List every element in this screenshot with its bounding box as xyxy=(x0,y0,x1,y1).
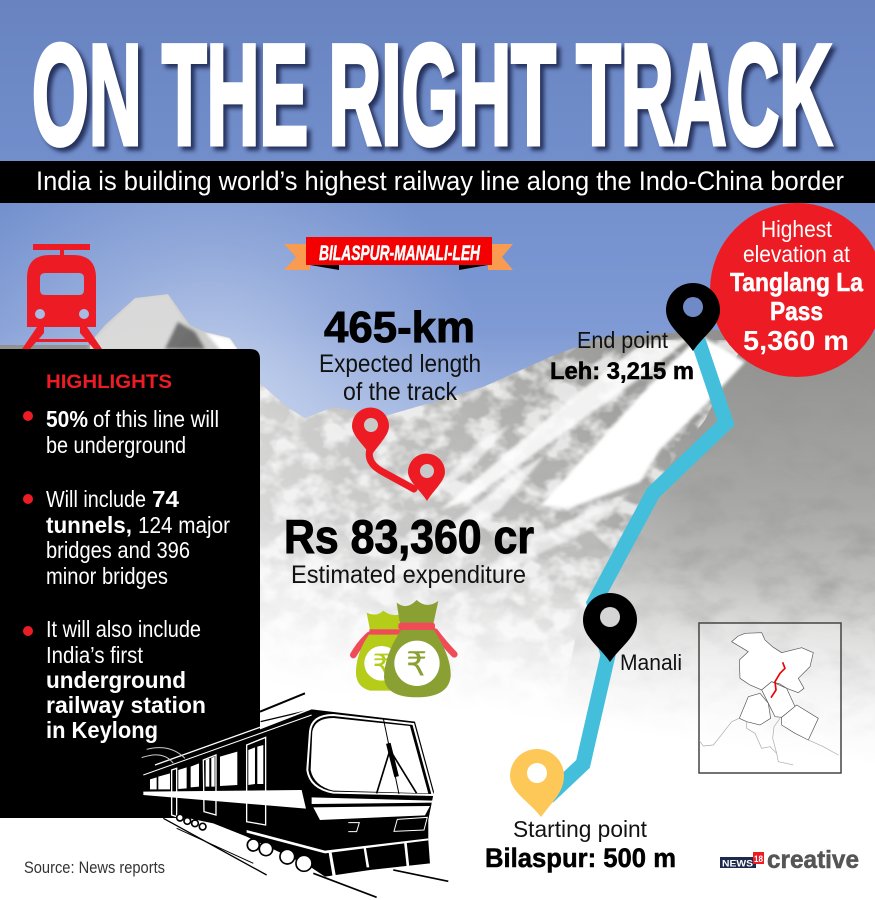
panel: highlights xyxy=(0,349,260,818)
highlight: tunnels and bridges: 124 major xyxy=(138,512,230,538)
ribbon: route name: BILASPUR-MANALI-LEH xyxy=(319,242,481,265)
logo: News18 creative: 18 xyxy=(754,854,763,864)
stat: expenditure: Estimated expenditure xyxy=(291,561,526,589)
marker: Leh end point xyxy=(550,283,720,385)
source: Source: News reports xyxy=(24,858,165,877)
highlight: tunnels and bridges: tunnels, xyxy=(46,512,132,538)
logo: News18 creative: NEWS xyxy=(722,858,753,870)
subtitle band: India is building world’s highest railway line along the Indo-China border xyxy=(36,166,844,196)
highlight: tunnels and bridges: Will include xyxy=(46,486,146,512)
illustration: metro train xyxy=(142,693,448,897)
highlight: 50 percent underground xyxy=(23,406,219,458)
stat: track length: 465-km xyxy=(324,303,475,352)
stat: track length: of the track xyxy=(343,378,457,406)
icon: money bags xyxy=(353,600,454,697)
callout: highest elevation: 5,360 m xyxy=(743,325,849,356)
highlight: underground station: It will also include xyxy=(46,616,201,642)
highlight: tunnels and bridges: 74 xyxy=(152,486,179,512)
stat: track length xyxy=(319,303,481,406)
icon: money bags: ₹ xyxy=(406,644,427,683)
highlight: underground station: India’s first xyxy=(46,642,144,668)
highlight: tunnels and bridges: bridges and 396 xyxy=(46,537,190,563)
highlight: underground station: railway station xyxy=(46,692,206,718)
callout: highest elevation: Highest xyxy=(761,216,833,242)
highlight: underground station: underground xyxy=(46,667,186,693)
marker: Leh end point: End point xyxy=(577,327,669,353)
marker: Manali: Manali xyxy=(620,650,682,675)
stat: expenditure xyxy=(284,510,534,589)
logo: News18 creative xyxy=(720,846,859,874)
marker: Leh end point: Leh: 3,215 m xyxy=(550,358,694,385)
highlight: underground station xyxy=(23,616,206,743)
highlight: 50 percent underground: 50% xyxy=(46,406,88,432)
stat: expenditure: Rs 83,360 cr xyxy=(284,510,534,563)
callout: highest elevation xyxy=(710,203,875,377)
route line xyxy=(548,340,726,797)
marker: Bilaspur starting point: Bilaspur: 500 m xyxy=(485,843,676,873)
marker: Bilaspur starting point xyxy=(485,749,676,873)
icon: red route pins xyxy=(352,408,445,501)
stat: track length: Expected length xyxy=(319,350,481,378)
ribbon: route name xyxy=(284,237,513,270)
inset map xyxy=(699,623,841,773)
heading: highlights: HIGHLIGHTS xyxy=(46,372,172,393)
highlight: underground station: in Keylong xyxy=(46,717,158,743)
icon: red train xyxy=(22,244,102,349)
callout: highest elevation: Pass xyxy=(770,296,823,326)
highlight: 50 percent underground: of this line will xyxy=(93,406,219,432)
logo: News18 creative: creative xyxy=(767,846,859,874)
subtitle band xyxy=(0,161,875,203)
highlight: 50 percent underground: be underground xyxy=(46,432,186,458)
highlight: tunnels and bridges xyxy=(23,486,230,589)
marker: Bilaspur starting point: Starting point xyxy=(513,816,648,842)
icon: money bags: ₹ xyxy=(373,648,391,682)
callout: highest elevation: elevation at xyxy=(743,241,851,267)
highlight: tunnels and bridges: minor bridges xyxy=(46,563,168,589)
marker: Manali xyxy=(583,593,682,675)
